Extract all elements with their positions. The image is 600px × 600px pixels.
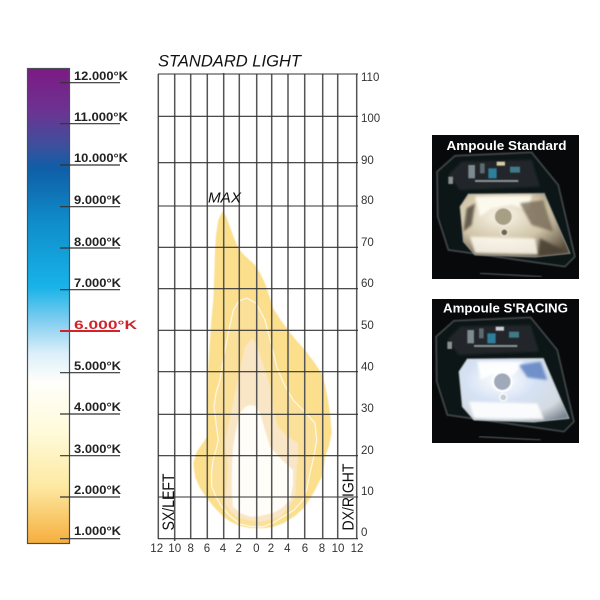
scale labels: 5.000°K: [74, 361, 122, 373]
headlight illustration: [436, 317, 574, 440]
chart title: STANDARD LIGHT: [158, 52, 303, 70]
horizontal axis numbers: 10: [332, 543, 344, 555]
horizontal axis numbers: 10: [168, 543, 181, 555]
panel: S'RACING bulb headlight: [432, 299, 579, 443]
scale ticks: [60, 83, 120, 539]
vertical axis numbers: 30: [361, 403, 374, 415]
beam: peach contour: [225, 338, 298, 522]
light beam chart: [150, 72, 380, 555]
horizontal axis numbers: 0: [253, 543, 260, 555]
scale labels: 6.000°K: [74, 320, 138, 332]
6000K red tick: [60, 330, 120, 332]
horizontal axis numbers: 6: [302, 543, 308, 555]
horizontal axis numbers: 2: [268, 543, 274, 555]
vertical axis numbers: 10: [361, 486, 374, 498]
scale labels: 2.000°K: [74, 485, 122, 497]
scale labels: 4.000°K: [74, 402, 122, 414]
scale labels: 11.000°K: [74, 112, 129, 124]
horizontal axis numbers: 8: [319, 543, 325, 555]
horizontal axis numbers: 12: [351, 543, 363, 555]
vertical axis numbers: 0: [361, 527, 367, 539]
vertical axis numbers: 80: [361, 195, 374, 207]
horizontal axis numbers: 6: [204, 543, 210, 555]
horizontal axis numbers: 8: [187, 543, 194, 555]
colour temperature scale: [28, 68, 138, 544]
chart grid: [158, 73, 358, 541]
panel caption: Ampoule S'RACING: [443, 302, 568, 316]
panel background: [432, 135, 579, 279]
vertical axis numbers: 60: [361, 278, 374, 290]
scale labels: 3.000°K: [74, 444, 122, 456]
beam: white core: [232, 405, 293, 517]
left side label: SX/LEFT: [159, 474, 178, 530]
vertical axis numbers: 50: [361, 320, 374, 332]
panel: standard bulb headlight: [432, 135, 579, 279]
beam: outer flame shape: [193, 211, 332, 528]
panel background: [432, 299, 579, 443]
scale labels: 7.000°K: [74, 278, 122, 290]
vertical axis numbers: 100: [361, 113, 380, 125]
scale labels: 9.000°K: [74, 195, 122, 207]
vertical axis numbers: 40: [361, 362, 374, 374]
vertical axis numbers: [361, 72, 380, 539]
right side label: DX/RIGHT: [340, 463, 358, 530]
panel caption: Ampoule Standard: [446, 139, 566, 153]
gradient bar: [28, 68, 70, 544]
horizontal axis numbers: 2: [235, 543, 242, 555]
scale labels: [74, 71, 138, 538]
horizontal axis numbers: 12: [150, 543, 163, 555]
vertical axis numbers: 90: [361, 155, 374, 167]
scale labels: 1.000°K: [74, 526, 122, 538]
vertical axis numbers: 70: [361, 237, 374, 249]
horizontal axis numbers: 4: [220, 543, 227, 555]
beam: middle contour: [212, 298, 317, 527]
MAX label: MAX: [208, 190, 242, 206]
horizontal axis numbers: [150, 543, 363, 555]
scale labels: 8.000°K: [74, 237, 122, 249]
vertical axis numbers: 110: [361, 72, 379, 84]
vertical axis numbers: 20: [361, 445, 374, 457]
headlight illustration: [437, 152, 575, 277]
scale labels: 12.000°K: [74, 71, 129, 83]
horizontal axis numbers: 4: [284, 543, 291, 555]
scale labels: 10.000°K: [74, 153, 129, 165]
